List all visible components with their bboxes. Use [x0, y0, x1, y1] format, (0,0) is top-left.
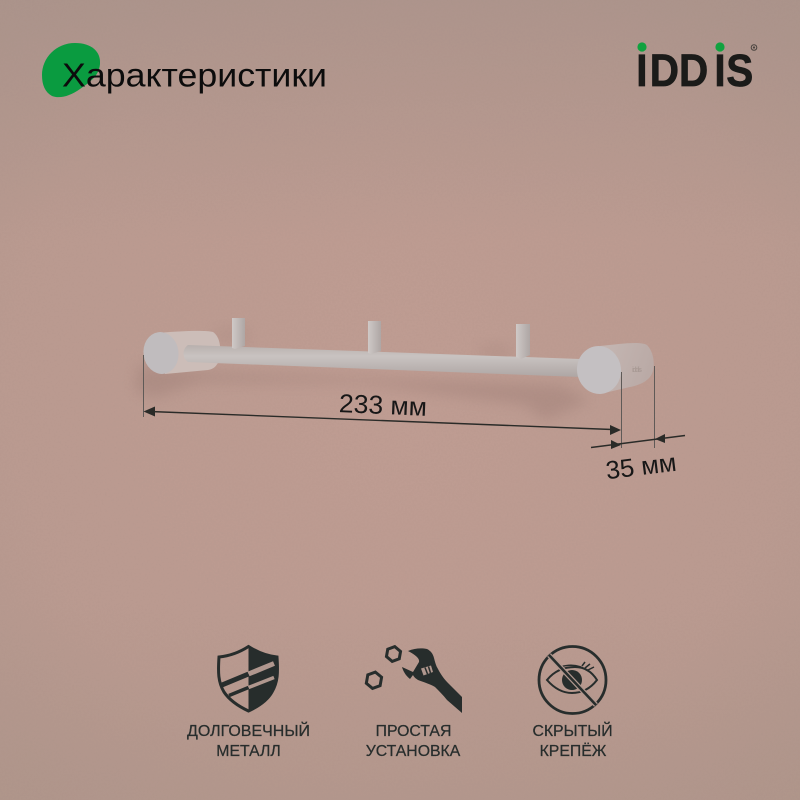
label: ПРОСТАЯ	[376, 723, 451, 740]
extension line	[654, 366, 656, 448]
label: ДОЛГОВЕЧНЫЙ	[187, 721, 310, 740]
extension line left	[142, 355, 144, 417]
icon: nuts and wrench	[366, 645, 462, 713]
peg 1	[232, 318, 245, 349]
left mount face	[141, 330, 181, 376]
length label: 233 мм	[338, 388, 428, 422]
feature: easy installation: УСТАНОВКА	[366, 743, 461, 760]
depth label: 35 мм	[604, 449, 678, 485]
left mount cylinder	[158, 331, 220, 374]
logo wordmark: IDDIS	[636, 46, 753, 97]
title with green blob	[42, 43, 327, 97]
feature: hidden fastening: КРЕПЁЖ	[540, 742, 607, 760]
icon: crossed-out eye	[539, 646, 606, 714]
dimension arrow	[144, 406, 621, 435]
towel rail product	[135, 318, 654, 421]
wrench	[402, 648, 462, 713]
right mount cylinder	[600, 343, 654, 394]
icon: shield	[219, 646, 277, 711]
horizontal rod	[184, 345, 580, 377]
dimension arrows	[591, 434, 685, 449]
nut 1	[386, 645, 401, 663]
peg 3	[516, 324, 530, 359]
right mount face	[574, 343, 624, 397]
nut 2	[366, 671, 382, 690]
IDDIS logo	[636, 42, 757, 97]
green blob	[42, 43, 100, 97]
extension line right	[620, 372, 622, 448]
dimension: depth 35 mm	[591, 366, 685, 485]
dimension: length 233 mm	[144, 355, 622, 448]
registered mark	[751, 45, 757, 50]
wall shadow	[135, 328, 590, 421]
label: СКРЫТЫЙ	[532, 721, 613, 740]
feature: hidden fastening	[532, 646, 613, 760]
peg 2	[368, 321, 381, 354]
right mount logo: iddis	[632, 367, 642, 374]
title text: Характеристики	[62, 56, 327, 94]
feature: durable metal	[187, 646, 310, 760]
logo dots	[637, 42, 725, 52]
wrench adjuster	[418, 663, 435, 678]
feature: easy installation	[366, 645, 462, 760]
feature: durable metal: МЕТАЛЛ	[216, 743, 281, 760]
